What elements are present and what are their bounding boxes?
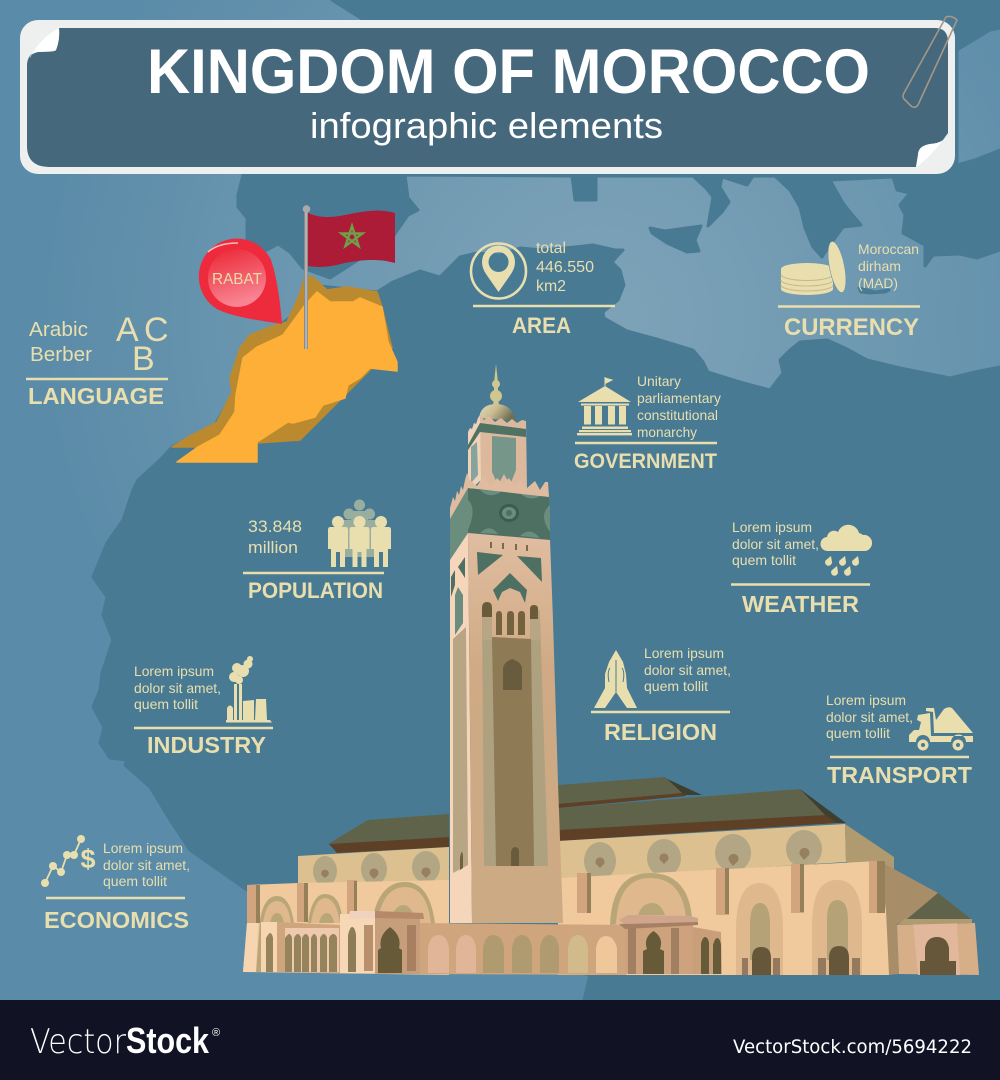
paperclip bbox=[903, 16, 957, 107]
icon: letters: C bbox=[144, 311, 169, 349]
title banner bbox=[20, 16, 957, 174]
roofs bbox=[328, 777, 846, 853]
area: AREA bbox=[512, 313, 571, 338]
colonnade bbox=[418, 923, 626, 975]
capital pin: Rabat: RABAT bbox=[212, 271, 262, 288]
language: Arabic bbox=[29, 319, 88, 341]
logo: Vector bbox=[30, 1022, 126, 1062]
footer bbox=[0, 1000, 1000, 1080]
Morocco map bbox=[172, 277, 397, 462]
transport: quem tollit bbox=[826, 725, 890, 741]
icon: people bbox=[328, 500, 391, 567]
logo: Stock bbox=[126, 1020, 210, 1061]
area: total bbox=[536, 240, 566, 257]
industry: Lorem ipsum bbox=[134, 663, 214, 679]
area: 446.550 bbox=[536, 259, 594, 276]
minaret bbox=[450, 364, 563, 923]
transport: TRANSPORT bbox=[827, 762, 972, 788]
lower walls bbox=[243, 861, 938, 975]
title: KINGDOM OF MOROCCO bbox=[147, 37, 870, 107]
tower shaft bbox=[450, 533, 563, 923]
weather: quem tollit bbox=[732, 552, 796, 568]
religion: dolor sit amet, bbox=[644, 662, 731, 678]
economics: dolor sit amet, bbox=[103, 857, 190, 873]
subtitle: infographic elements bbox=[310, 105, 663, 146]
language bbox=[26, 311, 169, 409]
economics bbox=[41, 835, 190, 933]
government: GOVERNMENT bbox=[574, 450, 717, 473]
left portal bbox=[340, 911, 424, 974]
icon: location pin bbox=[471, 244, 526, 298]
image id: VectorStock.com/5694222 bbox=[733, 1036, 972, 1058]
industry: dolor sit amet, bbox=[134, 680, 221, 696]
religion: RELIGION bbox=[604, 719, 717, 745]
population bbox=[243, 500, 391, 603]
government: monarchy bbox=[637, 424, 697, 440]
capital pin: Rabat bbox=[199, 239, 282, 324]
right pavilion bbox=[897, 893, 979, 975]
green tile band bbox=[450, 473, 550, 560]
right horseshoe portals bbox=[736, 880, 862, 975]
big arches bbox=[256, 873, 692, 972]
currency: Moroccan bbox=[858, 241, 919, 257]
industry: INDUSTRY bbox=[147, 732, 266, 758]
logo bbox=[30, 1020, 220, 1062]
weather bbox=[731, 519, 872, 617]
transport bbox=[826, 692, 973, 788]
logo: ® bbox=[212, 1027, 220, 1039]
transport: dolor sit amet, bbox=[826, 709, 913, 725]
left low arcade bbox=[243, 922, 340, 973]
weather: Lorem ipsum bbox=[732, 519, 812, 535]
religion: quem tollit bbox=[644, 678, 708, 694]
currency bbox=[778, 240, 920, 341]
weather: WEATHER bbox=[742, 591, 859, 617]
area bbox=[471, 240, 615, 338]
government: Unitary bbox=[637, 373, 681, 389]
icon: coins bbox=[781, 240, 849, 295]
government bbox=[574, 373, 721, 473]
icon: letters: A bbox=[116, 311, 139, 349]
icon: letters bbox=[116, 311, 169, 378]
currency: dirham bbox=[858, 258, 901, 274]
upper walls with medallions bbox=[298, 824, 894, 886]
pilasters bbox=[247, 861, 885, 923]
currency: (MAD) bbox=[858, 275, 898, 291]
icon: dump truck bbox=[909, 707, 973, 750]
icon: rain cloud bbox=[820, 525, 872, 576]
population: 33.848 bbox=[248, 517, 302, 536]
industry: quem tollit bbox=[134, 696, 198, 712]
religion: Lorem ipsum bbox=[644, 645, 724, 661]
icon: factory bbox=[226, 656, 272, 722]
religion bbox=[591, 645, 731, 745]
flag of Morocco bbox=[303, 205, 395, 349]
industry bbox=[134, 656, 273, 758]
economics: quem tollit bbox=[103, 873, 167, 889]
population: million bbox=[248, 538, 298, 557]
Hassan II mosque illustration bbox=[243, 364, 979, 975]
transport: Lorem ipsum bbox=[826, 692, 906, 708]
right portal bbox=[619, 915, 722, 974]
government: constitutional bbox=[637, 407, 718, 423]
government: parliamentary bbox=[637, 390, 721, 406]
icon: rising chart with dollar: $ bbox=[80, 844, 96, 874]
economics: Lorem ipsum bbox=[103, 840, 183, 856]
language: Berber bbox=[30, 344, 92, 366]
icon: letters: B bbox=[132, 340, 155, 378]
icon: parliament building bbox=[577, 377, 632, 435]
weather: dolor sit amet, bbox=[732, 536, 819, 552]
icon: rising chart with dollar bbox=[41, 835, 96, 887]
upper tower bbox=[468, 415, 527, 492]
area: km2 bbox=[536, 278, 566, 295]
language: LANGUAGE bbox=[28, 383, 164, 409]
currency: CURRENCY bbox=[784, 314, 919, 341]
spire and dome bbox=[479, 364, 516, 421]
population: POPULATION bbox=[248, 578, 383, 603]
economics: ECONOMICS bbox=[44, 907, 189, 933]
icon: praying hands bbox=[594, 650, 637, 708]
